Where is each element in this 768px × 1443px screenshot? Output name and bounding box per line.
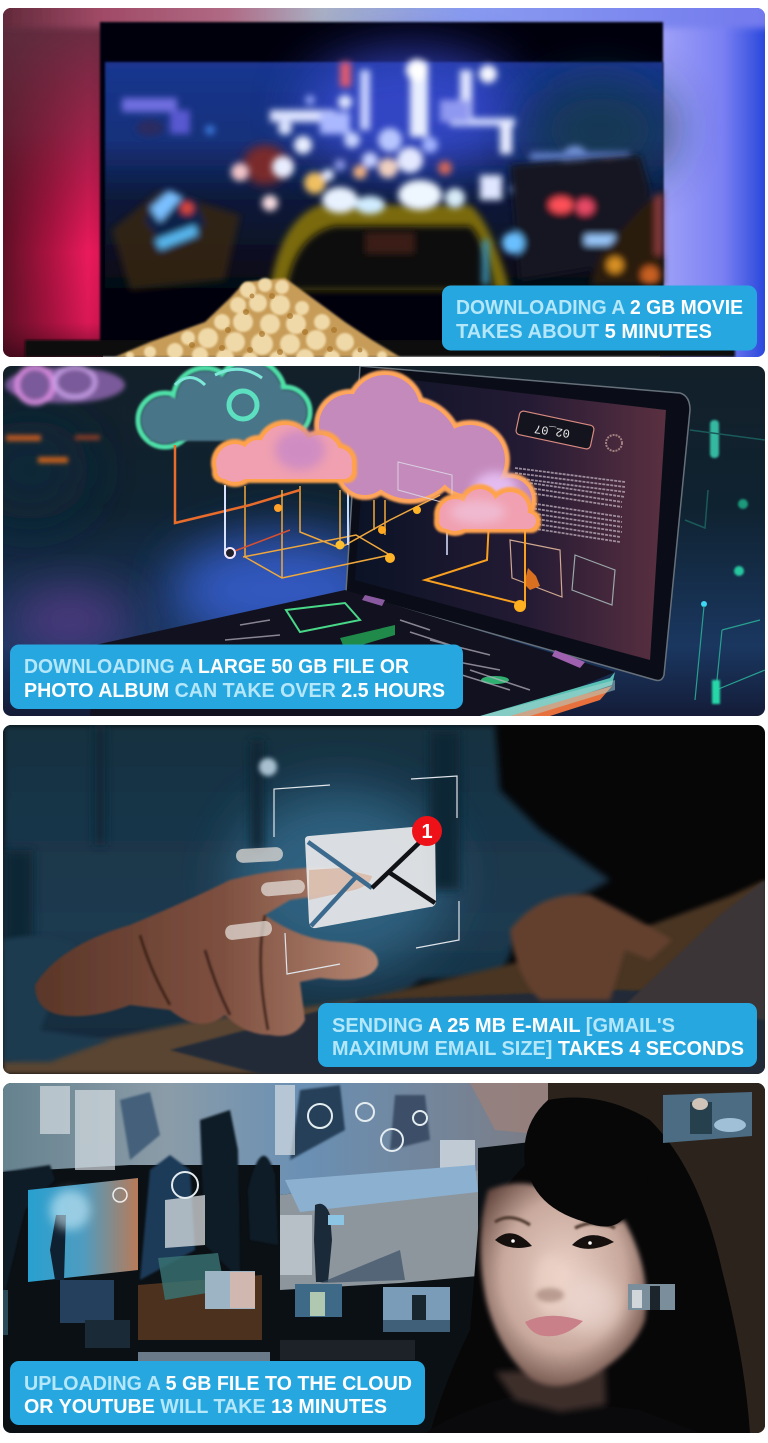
caption: email: MAXIMUM EMAIL SIZE] TAKES 4 SECONDS [332,1037,744,1060]
screen widget [515,410,595,450]
top-right photo tile [663,1092,752,1143]
caption: large file [10,644,463,709]
woman's hair [430,1098,750,1433]
bangs [525,1150,647,1227]
caption: large file: DOWNLOADING A LARGE 50 GB FILE OR [24,655,409,678]
caption: upload: OR YOUTUBE WILL TAKE 13 MINUTES [24,1395,387,1418]
lips [525,1316,583,1336]
pale light tiles [40,1083,548,1248]
icon: envelope [305,816,442,928]
left car [112,190,278,290]
dark backdrop [3,725,765,1074]
sheet figure [280,1204,405,1283]
yellow taxi [270,180,510,290]
television [100,22,670,347]
caption: upload: UPLOADING A 5 GB FILE TO THE CLOUD [24,1372,412,1395]
blue and purple glow [3,436,350,652]
laptop keyboard base [90,590,615,716]
circuit lines [175,445,525,605]
small photo tiles [3,1271,450,1364]
brows [495,1218,615,1228]
bright collage tile [28,1178,138,1282]
woman's face [480,1183,675,1386]
large pale sheet [280,1170,478,1290]
sheet blue band [285,1165,478,1212]
laptop [170,880,765,1074]
pointing hand [35,868,378,1036]
screen badge [606,435,622,451]
caption: email [318,1003,757,1067]
caption: movie [442,286,757,350]
woman's neck [495,1368,606,1412]
panel: upload [3,1083,765,1433]
corner brackets [274,776,459,974]
large pink cloud [314,370,537,527]
woman's shirt [425,1395,700,1433]
notification badge: 1 [421,821,433,843]
table left [3,1000,360,1074]
laptop screen [346,366,690,680]
blurred distant cloud [5,367,125,463]
table [360,880,765,1074]
right hand [510,894,672,1000]
caption: large file: PHOTO ALBUM CAN TAKE OVER 2.5 HOURS [24,679,445,702]
top collage band [3,1083,548,1195]
screen [105,50,670,290]
shirt light [230,790,450,970]
caption: movie: TAKES ABOUT 5 MINUTES [456,320,712,343]
teal small tile [158,1253,225,1300]
right blue wall [660,8,765,357]
interface bars [224,847,306,941]
sleeve [3,936,110,1062]
caption: movie: DOWNLOADING A 2 GB MOVIE [456,296,743,319]
screen code: 02_07 [533,421,571,440]
brown wall [545,1083,765,1433]
icon: popcorn [115,276,400,357]
caption: email: SENDING A 25 MB E-MAIL [GMAIL'S [332,1014,675,1037]
wood tile [138,1275,262,1340]
panel: email [3,725,765,1074]
screen icons [509,539,616,606]
panel: movie download [0,0,768,369]
shirt folds [3,725,460,950]
shirt button [259,758,277,776]
right cars [502,155,663,285]
right side circuit glow [685,420,765,704]
eyes [495,1233,614,1249]
caption: upload [10,1361,425,1425]
panel: cloud file download [0,360,765,716]
left red wall [3,8,103,357]
green neon cloud [138,360,310,447]
nose shadow [536,1288,564,1302]
small pink clouds [211,420,541,536]
dark backdrop [3,1083,765,1433]
screen text block [515,468,625,542]
line nodes [225,504,526,612]
collage silhouettes [3,1085,430,1300]
tech circles [172,1103,427,1198]
top coloured glow [3,8,765,32]
shirt [3,725,610,1060]
left cheek photo [628,1284,675,1310]
dark background [3,366,765,716]
TV stand shadow [25,340,735,357]
